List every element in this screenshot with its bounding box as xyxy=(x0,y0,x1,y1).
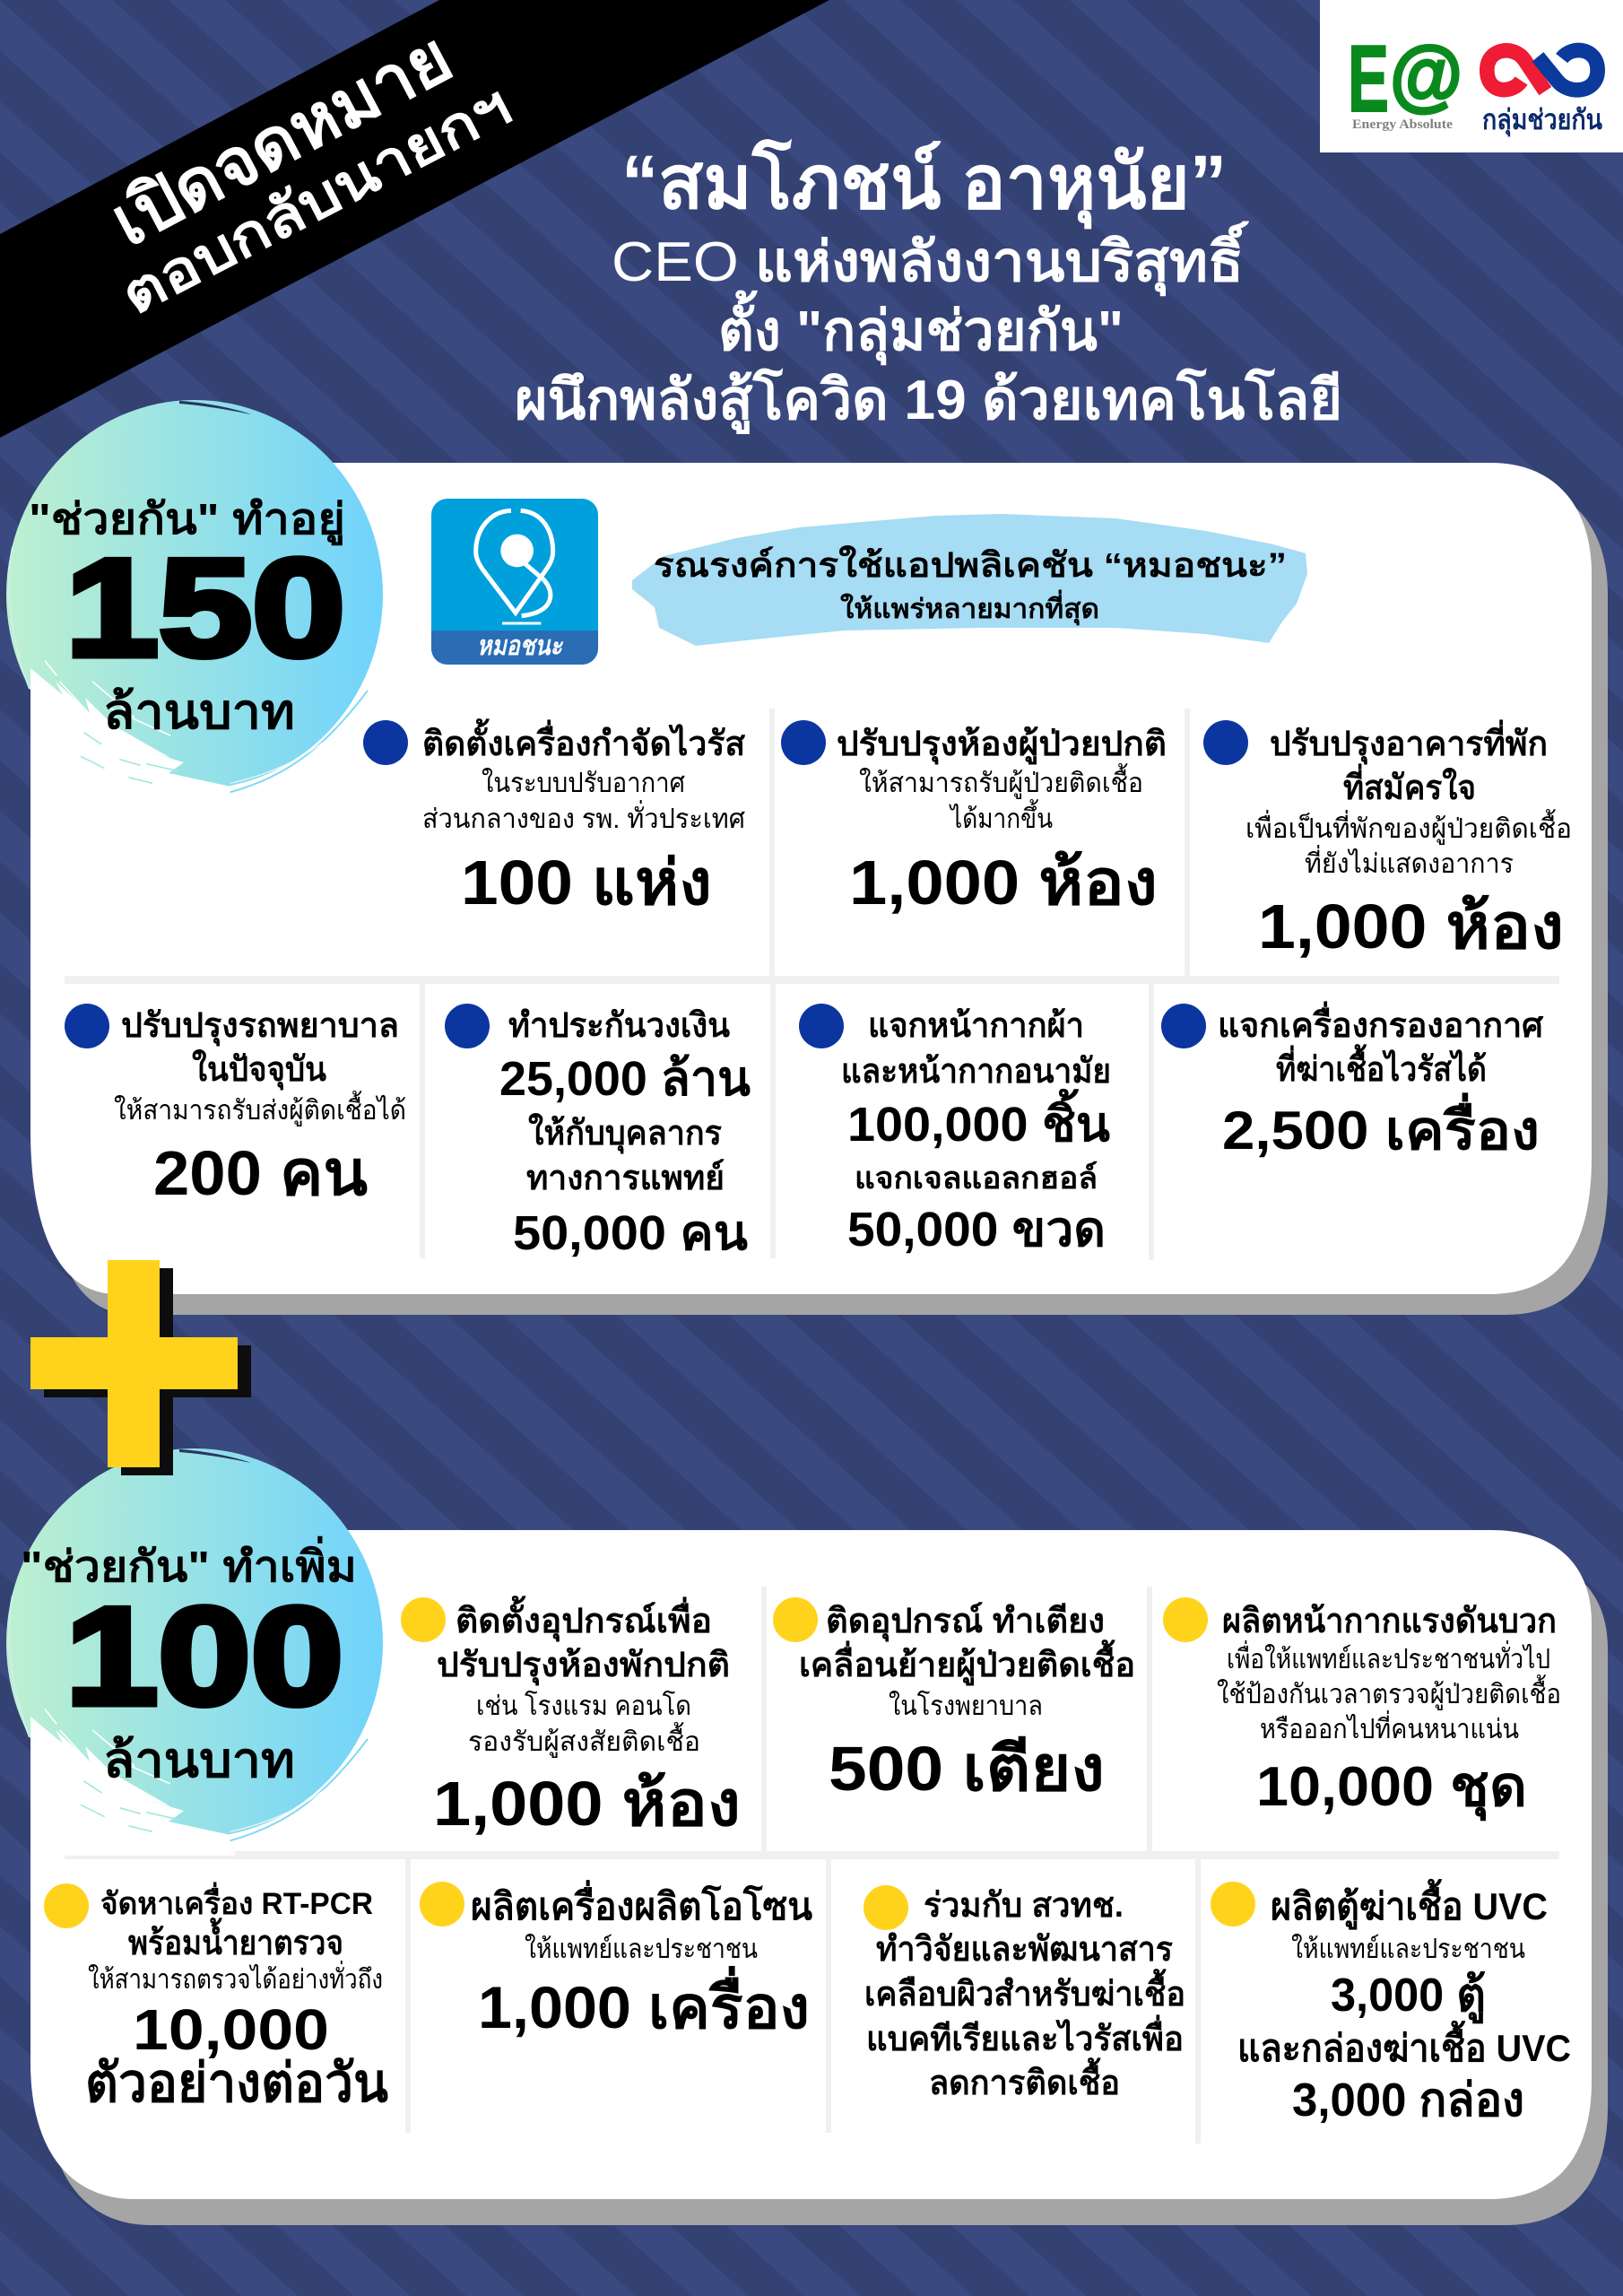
item: NSTDA coating research: แบคทีเรียและไวรัสเพื่อ xyxy=(866,2014,1184,2058)
badge: 150 million circle xyxy=(6,400,383,807)
logo box: กลุ่มช่วยกัน xyxy=(1482,104,1602,137)
item: mobile beds: 500 เตียง xyxy=(829,1734,1105,1804)
item: insurance: ทำประกันวงเงิน xyxy=(508,1007,730,1045)
item: masks and gel xyxy=(799,1004,1111,1257)
item: room upgrade equipment: ปรับปรุงห้องพักปกติ xyxy=(437,1647,730,1686)
item: voluntary lodging xyxy=(1203,719,1572,961)
badge: 150 million circle: ล้านบาท xyxy=(103,685,295,739)
item: voluntary lodging: ที่ยังไม่แสดงอาการ xyxy=(1305,845,1514,879)
title xyxy=(515,139,1342,434)
item: virus removal machines xyxy=(363,718,746,918)
item: normal patient rooms: ได้มากขึ้น xyxy=(949,799,1053,834)
item: insurance: ทางการแพทย์ xyxy=(526,1159,725,1197)
item: ambulances: ให้สามารถรับส่งผู้ติดเชื้อได้ xyxy=(114,1091,406,1126)
item: room upgrade equipment: 1,000 ห้อง xyxy=(433,1769,741,1839)
badge: 100 million circle: "ช่วยกัน" ทำเพิ่ม xyxy=(21,1535,357,1591)
item: NSTDA coating research: ร่วมกับ สวทช. xyxy=(924,1887,1124,1925)
black corner banner: ตอบกลับนายกฯ xyxy=(112,74,521,326)
item: ambulances: ในปัจจุบัน xyxy=(192,1049,326,1091)
panel: additional work 100 million xyxy=(30,1530,1608,2225)
item: virus removal machines: ส่วนกลางของ รพ. ทั่วประเทศ xyxy=(422,800,745,834)
item: UVC cabinets: 3,000 ตู้ xyxy=(1331,1970,1486,2024)
item: UVC cabinets xyxy=(1211,1878,1571,2126)
item: ambulances: 200 คน xyxy=(153,1138,368,1208)
item: positive pressure masks: เพื่อให้แพทย์และประชาชนทั่วไป xyxy=(1227,1640,1550,1674)
item: RT-PCR machines: ตัวอย่างต่อวัน xyxy=(85,2053,388,2113)
item: mobile beds: ในโรงพยาบาล xyxy=(889,1690,1043,1721)
title: ตั้ง "กลุ่มช่วยกัน" xyxy=(718,290,1124,365)
title: ผนึกพลังสู้โควิด 19 ด้วยเทคโนโลยี xyxy=(515,367,1342,434)
badge: 100 million circle xyxy=(6,1448,383,1856)
item: room upgrade equipment: เช่น โรงแรม คอนโด xyxy=(476,1690,691,1721)
item: air purifiers: ที่ฆ่าเชื้อไวรัสได้ xyxy=(1276,1044,1487,1089)
item: normal patient rooms: ให้สามารถรับผู้ป่วยติดเชื้อ xyxy=(859,763,1143,799)
item: room upgrade equipment: ติดตั้งอุปกรณ์เพื่อ xyxy=(456,1596,712,1642)
item: ozone generators: ให้แพทย์และประชาชน xyxy=(525,1934,758,1964)
item: voluntary lodging: เพื่อเป็นที่พักของผู้ป่วยติดเชื้อ xyxy=(1245,809,1572,845)
item: masks and gel: แจกเจลแอลกฮอล์ xyxy=(855,1161,1098,1196)
item: mobile beds: ติดอุปกรณ์ ทำเตียง xyxy=(826,1602,1105,1642)
item: insurance: 25,000 ล้าน xyxy=(499,1052,751,1106)
item: UVC cabinets: ผลิตตู้ฆ่าเชื้อ UVC xyxy=(1271,1878,1548,1930)
icon: yellow plus sign xyxy=(30,1260,251,1475)
item: masks and gel: 50,000 ขวด xyxy=(847,1203,1106,1257)
item: masks and gel: และหน้ากากอนามัย xyxy=(841,1053,1111,1091)
item: voluntary lodging: 1,000 ห้อง xyxy=(1258,891,1564,961)
item: RT-PCR machines: ให้สามารถตรวจได้อย่างทั่วถึง xyxy=(88,1961,383,1995)
item: ozone generators: 1,000 เครื่อง xyxy=(478,1965,810,2040)
campaign callout with brush background xyxy=(632,514,1307,646)
title: “สมโภชน์ อาหุนัย” xyxy=(621,139,1227,230)
campaign callout with brush background: รณรงค์การใช้แอปพลิเคชัน “หมอชนะ” xyxy=(654,545,1287,585)
campaign callout with brush background: ให้แพร่หลายมากที่สุด xyxy=(840,589,1099,626)
item: insurance: ให้กับบุคลากร xyxy=(528,1113,723,1154)
item: RT-PCR machines: พร้อมน้ำยาตรวจ xyxy=(128,1918,343,1962)
item: insurance xyxy=(445,1004,751,1260)
panel: existing work 150 million xyxy=(30,463,1608,1315)
logo box: E xyxy=(1348,26,1389,132)
item: voluntary lodging: ที่สมัครใจ xyxy=(1343,763,1476,807)
item: NSTDA coating research: ลดการติดเชื้อ xyxy=(929,2057,1120,2102)
item: mobile beds: เคลื่อนย้ายผู้ป่วยติดเชื้อ xyxy=(799,1639,1135,1686)
item: positive pressure masks: 10,000 ชุด xyxy=(1256,1756,1527,1821)
item: insurance: 50,000 คน xyxy=(513,1206,748,1260)
item: normal patient rooms: ปรับปรุงห้องผู้ป่วยปกติ xyxy=(837,726,1167,765)
item: normal patient rooms xyxy=(781,720,1167,918)
badge: 150 million circle: 150 xyxy=(65,530,345,685)
item: air purifiers: แจกเครื่องกรองอากาศ xyxy=(1218,1001,1544,1045)
item: NSTDA coating research xyxy=(864,1885,1185,2102)
item: positive pressure masks: ใช้ป้องกันเวลาตรวจผู้ป่วยติดเชื้อ xyxy=(1217,1674,1561,1710)
item: positive pressure masks: ผลิตหน้ากากแรงดันบวก xyxy=(1222,1603,1557,1640)
item: ozone generators: ผลิตเครื่องผลิตโอโซน xyxy=(471,1880,812,1927)
title: CEO แห่งพลังงานบริสุทธิ์ xyxy=(612,221,1250,296)
badge: 100 million circle: 100 xyxy=(65,1578,343,1734)
item: normal patient rooms: 1,000 ห้อง xyxy=(849,848,1158,918)
item: RT-PCR machines: จัดหาเครื่อง RT-PCR xyxy=(100,1882,373,1921)
item: air purifiers: 2,500 เครื่อง xyxy=(1222,1092,1540,1161)
item: mobile beds xyxy=(773,1597,1135,1804)
item: ambulances: ปรับปรุงรถพยาบาล xyxy=(121,1007,399,1047)
item: UVC cabinets: 3,000 กล่อง xyxy=(1292,2074,1524,2126)
item: RT-PCR machines: 10,000 xyxy=(133,1997,329,2062)
logo box: Energy Absolute xyxy=(1352,117,1453,132)
item: masks and gel: แจกหน้ากากผ้า xyxy=(868,1007,1084,1045)
item: ozone generators xyxy=(420,1880,812,2040)
logo box: @ xyxy=(1390,30,1462,118)
item: virus removal machines: ติดตั้งเครื่องกำจัดไวรัส xyxy=(422,718,746,763)
item: NSTDA coating research: ทำวิจัยและพัฒนาสาร xyxy=(876,1931,1174,1969)
badge: 100 million circle: ล้านบาท xyxy=(103,1734,295,1787)
item: room upgrade equipment: รองรับผู้สงสัยติดเชื้อ xyxy=(468,1722,700,1758)
item: UVC cabinets: ให้แพทย์และประชาชน xyxy=(1291,1934,1525,1964)
badge: 150 million circle: "ช่วยกัน" ทำอยู่ xyxy=(29,496,345,546)
item: positive pressure masks xyxy=(1163,1597,1561,1821)
icon: Mor Chana app xyxy=(431,499,598,665)
item: air purifiers xyxy=(1161,1001,1544,1161)
item: NSTDA coating research: เคลือบผิวสำหรับฆ่าเชื้อ xyxy=(864,1969,1185,2013)
logo box xyxy=(1320,0,1623,152)
black corner banner xyxy=(0,0,829,438)
black corner banner: เปิดจดหมาย xyxy=(99,17,464,261)
item: room upgrade equipment xyxy=(401,1596,741,1839)
item: ambulances xyxy=(65,1004,406,1208)
icon: Mor Chana app: หมอชนะ xyxy=(477,631,564,661)
item: masks and gel: 100,000 ชิ้น xyxy=(847,1089,1110,1152)
item: virus removal machines: ในระบบปรับอากาศ xyxy=(482,768,685,798)
item: UVC cabinets: และกล่องฆ่าเชื้อ UVC xyxy=(1237,2020,1571,2069)
item: virus removal machines: 100 แห่ง xyxy=(461,848,712,918)
item: positive pressure masks: หรือออกไปที่คนหนาแน่น xyxy=(1260,1710,1519,1744)
item: voluntary lodging: ปรับปรุงอาคารที่พัก xyxy=(1270,719,1548,765)
item: RT-PCR machines xyxy=(44,1882,388,2113)
